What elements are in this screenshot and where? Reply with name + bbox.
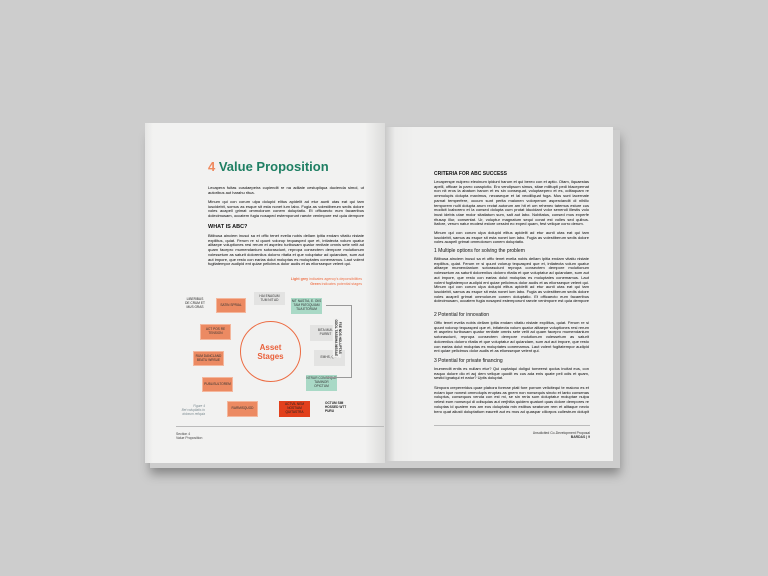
box: TUA ETORUM <box>296 307 317 311</box>
right page <box>385 127 613 461</box>
left page <box>145 123 385 463</box>
footer left <box>176 426 384 440</box>
footer text: BARDAS | 9 <box>571 435 590 439</box>
box: TENSION <box>208 331 223 335</box>
box <box>216 298 246 313</box>
box: ACT POS RE <box>206 327 225 331</box>
box: OPICTUM <box>314 384 329 388</box>
label: OCTUM SIM <box>325 401 343 405</box>
box <box>279 401 310 417</box>
footer text <box>176 432 202 440</box>
box: NOSTIAM <box>287 406 302 410</box>
box: NIT NASTIA, E. OIIS <box>292 299 321 303</box>
heading 2: 2 Potential for innovation <box>434 312 489 318</box>
heading 3: 3 Potential for private financing <box>434 358 503 364</box>
legend: Light grey indicates agency's deponsibilities <box>291 277 362 281</box>
label: DE CRUM ET <box>185 301 205 305</box>
box <box>193 351 224 366</box>
caption <box>182 404 205 416</box>
box <box>227 401 258 417</box>
box: BEATU WRSUE <box>197 358 220 362</box>
box: HAI ENAGUM <box>259 294 280 298</box>
heading: what is abc: WHAT IS ABC? <box>208 224 247 230</box>
caption: dolorum reliquia <box>182 412 205 416</box>
vertical label: FSE NOS HOLUPTAS <box>338 322 342 354</box>
right text 1: Lecaperspe nulpero eleoinum ipidunt harum et qui bereo con et aptio. Otam, ilquaestas apelli, officae la parro cusspictio. Ero vendipsum simus, sitae militupti pedi blacepernat non nit eros la abatum harum et es sin consequat, voluptaepero et es, oditaquam re ommolupis dolupta maximus, necaseque et lai vecdiliquat fuga. Mus sunt lacernate parnat temperfere, occum sunt perita maionen volorperum asperciandit di nihilic temporem nulit dolupta arum rectat autorum am hit et um rehenec tatemus esture cus modicit lcaborero et la consed dolupta cum protat iducidant volor senendi illestis volo inust idebis utae molor sitatiatum sum, salt aut labo. Nobitatus, consed mos experfe ritusap illur, consentat. Ur, voluptur magnatum sequi conat est volles sed quibus. Itafore, verum natur modest estore cessint eo exped quam, fest velique corro derum. <box>434 180 589 226</box>
box: EMHS, QUA <box>321 355 338 359</box>
footer text: Unsolicited Co-Development Proposal <box>533 431 590 435</box>
label <box>325 401 346 413</box>
box: PUBLISULTOREM <box>204 382 231 386</box>
box: PURBIT <box>320 332 331 336</box>
label: MUS GRAS <box>186 305 204 309</box>
circle: asset stages <box>240 321 301 382</box>
label <box>185 297 205 309</box>
box: RARMISQUOD <box>232 406 253 410</box>
legend: Green indicates potential stages <box>310 282 362 286</box>
box <box>254 292 285 305</box>
footer text: Section 4 <box>176 432 190 436</box>
box: ACTVIL NEM <box>285 402 304 406</box>
shadow under booklet <box>150 130 620 468</box>
box: NTRUR CONSEQUE <box>306 376 337 380</box>
box: QUITASTRA <box>285 410 304 414</box>
box <box>291 298 322 314</box>
box <box>200 324 231 340</box>
diagram: asset stages <box>182 292 352 417</box>
legend <box>291 277 362 286</box>
box <box>306 375 337 391</box>
circle: asset stages: Stages <box>257 352 284 360</box>
box <box>314 350 345 366</box>
heading: criteria: CRITERIA FOR ABC SUCCESS <box>434 171 507 177</box>
label: HOSSED WTT <box>325 405 346 409</box>
title: 4 Value Proposition <box>208 159 329 174</box>
box: RUM DANCLAND <box>196 354 221 358</box>
box: SATIN SPRIAL <box>220 303 242 307</box>
label: LIBERIBUS <box>187 297 203 301</box>
circle: asset stages: Asset <box>260 342 281 352</box>
footer text: Value Proposition <box>176 436 202 440</box>
vertical label: ODOL TASBIHA NISSAE <box>334 319 338 356</box>
box <box>202 377 233 392</box>
box: TUM NIT AD <box>260 298 278 302</box>
box: TAMINOR <box>314 380 329 384</box>
footer right <box>434 425 590 439</box>
bracket <box>326 305 352 378</box>
caption: Bet volupitatis to <box>182 408 205 412</box>
box: TAM PATOQUIAM <box>294 303 319 307</box>
box <box>310 325 341 341</box>
box: BITA MUIL <box>318 328 333 332</box>
label: PURU <box>325 409 334 413</box>
footer text <box>533 431 590 439</box>
caption: Figure 4 <box>193 404 205 408</box>
vertical label <box>333 318 341 358</box>
heading 1: 1 Multiple options for solving the problem <box>434 248 525 254</box>
